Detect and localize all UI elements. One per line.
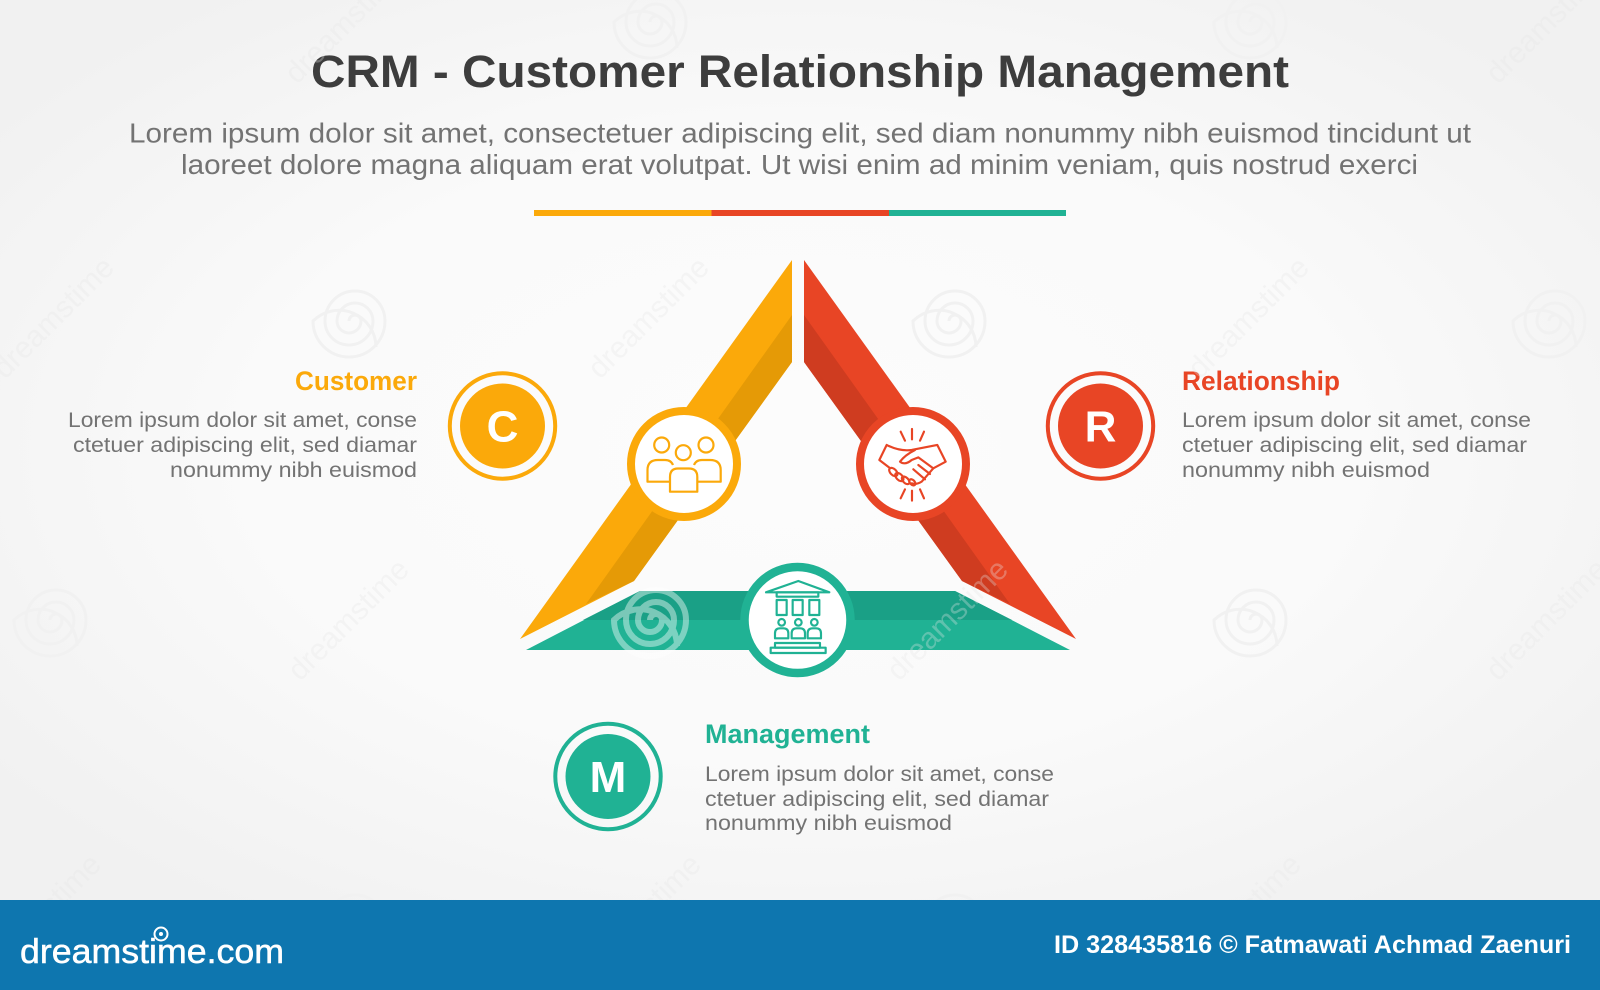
icon circle: people [631, 411, 737, 517]
text: relationship body [1182, 409, 1531, 482]
heading: customer: Customer [295, 366, 417, 396]
panel: customer [68, 366, 555, 482]
text: customer body [68, 409, 417, 482]
subtitle [129, 118, 1471, 180]
text: relationship body: ctetuer adipiscing elit, sed diamar [1182, 434, 1527, 457]
badge: R [1048, 373, 1153, 479]
subtitle: Lorem ipsum dolor sit amet, consectetuer adipiscing elit, sed diam nonummy nibh euismod tincidunt ut [129, 118, 1471, 148]
watermark text: dreamstime [1174, 848, 1308, 982]
watermark text: dreamstime [881, 553, 1015, 687]
icon: handshake [879, 429, 946, 501]
text: management body: ctetuer adipiscing elit, sed diamar [705, 788, 1049, 811]
footer bar [0, 900, 1600, 990]
heading: relationship: Relationship [1182, 366, 1340, 396]
watermark text: dreamstime [582, 251, 716, 385]
badge: M: M [590, 753, 626, 802]
watermark text: dreamstime [282, 553, 416, 687]
triangle diagram [520, 260, 1076, 673]
subtitle: laoreet dolore magna aliquam erat volutpat. Ut wisi enim ad minim veniam, quis nostrud exerci [181, 149, 1418, 180]
text: customer body: nonummy nibh euismod [170, 459, 417, 482]
segment: green management [526, 591, 1070, 650]
icon: group of people [648, 438, 721, 492]
footer logo: dreamstime.com [20, 933, 284, 971]
icon circle: handshake [860, 411, 966, 517]
icon circle: building [744, 567, 850, 673]
text: relationship body: nonummy nibh euismod [1182, 459, 1430, 482]
text: customer body: Lorem ipsum dolor sit amet, conse [68, 409, 417, 432]
text: management body [705, 763, 1054, 835]
panel: relationship [1048, 366, 1531, 482]
text: management body: nonummy nibh euismod [705, 812, 952, 835]
title: CRM - Customer Relationship Management [311, 46, 1289, 97]
segment: yellow customer [520, 260, 792, 639]
segment: red relationship [804, 260, 1076, 639]
heading: management: Management [705, 719, 870, 749]
text: management body: Lorem ipsum dolor sit amet, conse [705, 763, 1054, 786]
watermark text: dreamstime [574, 848, 708, 982]
text: customer body: ctetuer adipiscing elit, sed diamar [73, 434, 417, 457]
badge: C: C [487, 402, 518, 452]
badge: R: R [1085, 402, 1116, 452]
watermark spiral on green bar [614, 590, 686, 656]
panel: management [555, 719, 1054, 835]
footer credit: ID 328435816 © Fatmawati Achmad Zaenuri [1054, 931, 1571, 959]
tricolor divider [534, 210, 1066, 216]
badge: M [555, 724, 661, 829]
badge: C [450, 373, 555, 479]
text: relationship body: Lorem ipsum dolor sit amet, conse [1182, 409, 1531, 432]
icon: building with people [766, 581, 829, 653]
watermark text: dreamstime [1182, 251, 1316, 385]
